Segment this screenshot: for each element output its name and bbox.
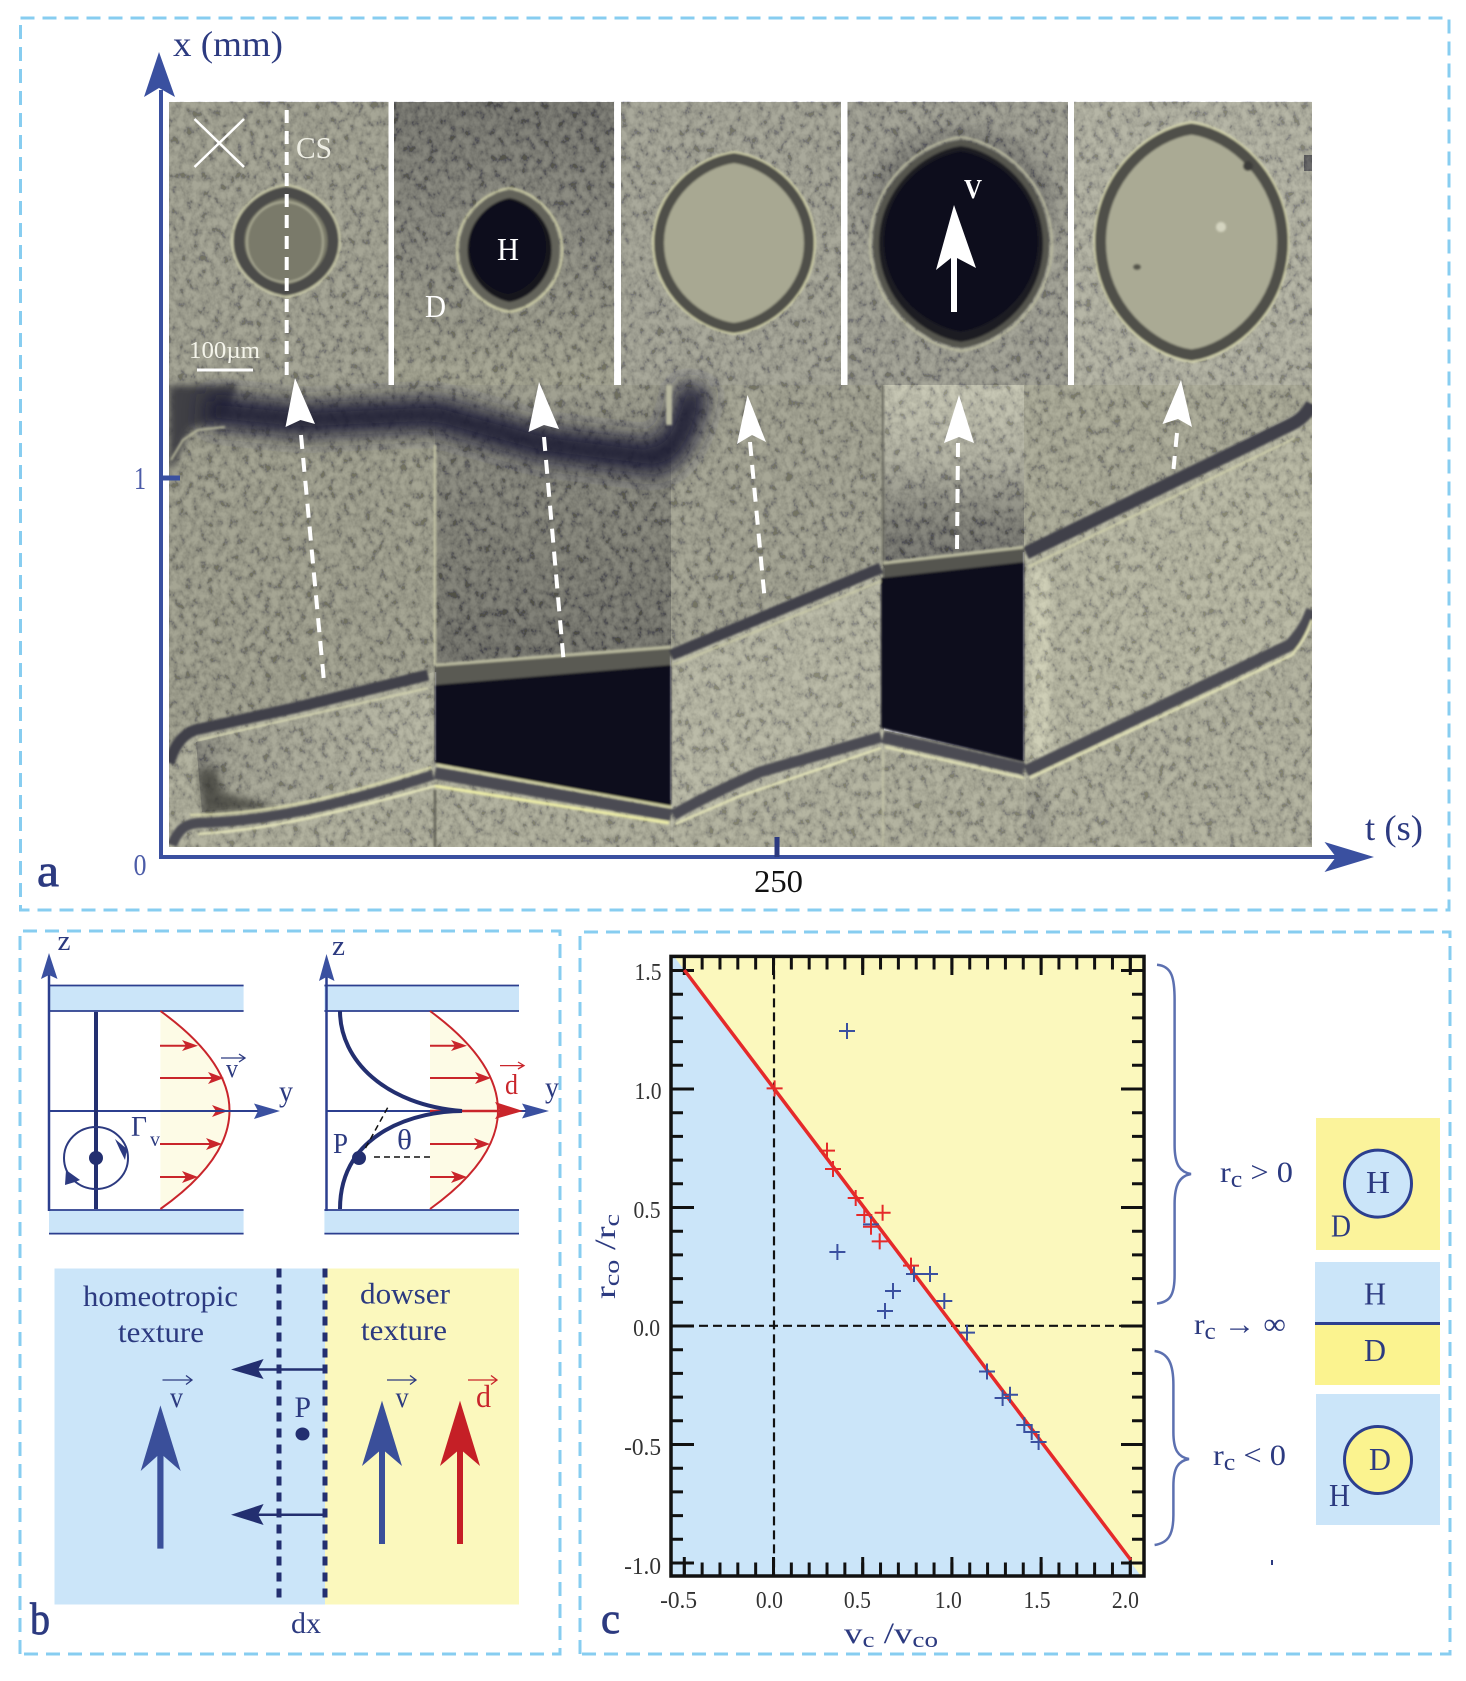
- y axis: [326, 1110, 530, 1112]
- label V: V: [964, 174, 982, 204]
- d vector label: [500, 1062, 524, 1101]
- defect lines and black domains: [169, 385, 1312, 847]
- label z: z: [332, 931, 345, 962]
- dark corner: [169, 385, 238, 470]
- blue v arrow dowser: [362, 1401, 402, 1544]
- blue v arrow homeotropic: [141, 1405, 181, 1549]
- blue region: [671, 956, 1144, 1576]
- label d: [468, 1376, 497, 1414]
- x tick labels: 0.5: [844, 1588, 871, 1614]
- x axis title: /v: [874, 1617, 912, 1650]
- x axis title: v: [844, 1617, 859, 1650]
- droplet 1: [232, 185, 340, 297]
- gamma subscript: v: [150, 1129, 160, 1151]
- d vector label: d: [505, 1070, 518, 1101]
- panel b: [20, 926, 560, 1654]
- y tick labels: 0.5: [634, 1198, 660, 1224]
- y axis head: [522, 1104, 549, 1118]
- dashed arrow 1: [286, 378, 324, 687]
- y tick labels: -0.5: [624, 1435, 661, 1461]
- micrograph backgrounds: [169, 102, 1312, 385]
- text texture: texture: [118, 1316, 204, 1349]
- tangent dashed: [366, 1107, 388, 1148]
- v vector label: v: [226, 1054, 238, 1083]
- label y: y: [545, 1071, 559, 1104]
- scale label: 100µm: [189, 338, 260, 364]
- y tick labels: -1.0: [624, 1554, 661, 1580]
- lower brace: [1155, 1351, 1189, 1545]
- horizontal dashed: [374, 1156, 430, 1158]
- label dx: dx: [291, 1607, 321, 1640]
- droplet 3: [653, 152, 815, 334]
- scatter chart: [589, 956, 1144, 1652]
- y tick labels: 1.5: [634, 960, 662, 986]
- yellow region: [674, 956, 1144, 1576]
- director curve: [340, 1011, 462, 1209]
- tick 0: 0: [134, 847, 146, 882]
- schematic rc>0: H: [1366, 1164, 1390, 1200]
- glass plates: [49, 986, 244, 1234]
- label v: v: [170, 1381, 183, 1414]
- label y: y: [279, 1075, 293, 1108]
- fit line: [684, 970, 1131, 1560]
- panel letter a: a: [37, 845, 59, 896]
- droplet 2 black: [457, 188, 562, 312]
- panel a: [20, 18, 1449, 910]
- label v: [387, 1376, 416, 1414]
- text texture: texture: [361, 1314, 447, 1347]
- dashed arrow 2: [528, 382, 564, 665]
- x axis t(s) arrow: [159, 837, 1374, 872]
- tick marks: [677, 963, 1138, 1569]
- y axis x(mm) arrow: [144, 52, 180, 857]
- label theta: θ: [397, 1125, 412, 1156]
- x tick labels: [660, 1588, 1139, 1614]
- point P: [352, 1151, 366, 1165]
- label D: D: [425, 288, 446, 324]
- micrograph and space-time photo: [169, 101, 1312, 850]
- space-time fields: [169, 385, 1312, 850]
- axis label x: x (mm): [173, 24, 283, 64]
- y axis head: [254, 1104, 280, 1119]
- label rc < 0: r: [1213, 1439, 1223, 1472]
- y tick labels: [624, 960, 662, 1580]
- x tick labels: 1.0: [935, 1588, 962, 1614]
- gamma label: Γ: [131, 1112, 147, 1143]
- schematic rc infinite: D: [1364, 1332, 1386, 1368]
- upper brace: [1157, 965, 1191, 1304]
- axis label t: t (s): [1365, 808, 1423, 848]
- schematic rc>0: D: [1331, 1208, 1351, 1244]
- x tick labels: 2.0: [1112, 1588, 1139, 1614]
- red data points: [767, 1080, 919, 1274]
- dashed arrow 3: [737, 395, 766, 597]
- scale bar: [197, 368, 253, 372]
- panel letter c: c: [601, 1596, 620, 1643]
- label rc > 0: r: [1220, 1156, 1230, 1189]
- tick 1: 1: [134, 460, 146, 496]
- lower motion arrow: [231, 1504, 325, 1525]
- panel letter b: b: [30, 1593, 50, 1644]
- droplet 4 black: [870, 137, 1052, 351]
- label rc > 0: > 0: [1242, 1156, 1293, 1189]
- vignette of left field: [198, 768, 280, 814]
- schematic rc<0: D: [1369, 1441, 1391, 1477]
- z axis head: [319, 954, 334, 981]
- y axis title: /r: [589, 1227, 622, 1260]
- label rc < 0: < 0: [1235, 1439, 1286, 1472]
- director arrow: [430, 1102, 523, 1119]
- label H: H: [497, 231, 519, 267]
- texture noise: [169, 101, 1312, 847]
- homeotropic region: [54, 1268, 325, 1604]
- label rc to infinity: → ∞: [1216, 1308, 1286, 1341]
- y tick labels: 1.0: [634, 1079, 662, 1105]
- polarizer cross: [194, 119, 244, 167]
- text dowser: dowser: [360, 1278, 450, 1310]
- y axis title: r: [589, 1289, 622, 1299]
- x axis title: c: [862, 1627, 875, 1652]
- x axis title: co: [912, 1627, 938, 1652]
- tick 250: 250: [754, 863, 803, 899]
- y axis: [49, 1110, 260, 1112]
- label rc < 0: c: [1224, 1450, 1235, 1476]
- z axis: [325, 975, 328, 1211]
- y axis title: co: [599, 1260, 624, 1286]
- label rc to infinity: c: [1205, 1319, 1216, 1345]
- left schematic: vortex: [41, 926, 293, 1234]
- profile arrows: [160, 1040, 228, 1183]
- label P: P: [333, 1128, 348, 1160]
- schematic rc>0: [1316, 1118, 1440, 1250]
- label v: [162, 1376, 192, 1414]
- profile arrows: [430, 1040, 491, 1183]
- velocity profile: [430, 1011, 498, 1209]
- y tick labels: 0.0: [633, 1316, 660, 1342]
- velocity arrow: [936, 205, 976, 312]
- v vector label: [221, 1054, 245, 1083]
- panel c: [580, 932, 1450, 1654]
- frame: [671, 956, 1144, 1576]
- dowser region: [325, 1268, 519, 1604]
- cross-section dashed line: [285, 110, 289, 377]
- schematic rc infinite: [1315, 1262, 1440, 1385]
- vortex line: [94, 1012, 98, 1209]
- x tick labels: 0.0: [756, 1588, 783, 1614]
- dashed axes: [671, 956, 1144, 1576]
- y axis title: c: [599, 1214, 624, 1227]
- rotation circle: [64, 1127, 128, 1189]
- dotted boundaries: [279, 1268, 325, 1604]
- point P: [296, 1428, 310, 1440]
- x tick labels: -0.5: [660, 1588, 697, 1614]
- label rc to infinity: r: [1194, 1308, 1204, 1341]
- droplet 5: [1094, 122, 1288, 362]
- z axis: [48, 975, 50, 1211]
- velocity profile: [160, 1011, 230, 1209]
- dashed arrow 4: [944, 395, 974, 551]
- red d arrow: [440, 1401, 480, 1544]
- z axis head: [41, 953, 58, 979]
- dark smear: [205, 385, 694, 458]
- label v: v: [396, 1381, 409, 1414]
- schematic rc<0: H: [1329, 1477, 1350, 1513]
- upper motion arrow: [231, 1359, 325, 1379]
- schematic rc<0: [1316, 1394, 1440, 1525]
- white dividers: [388, 101, 1074, 385]
- label CS: CS: [296, 130, 332, 165]
- stray mark: [1271, 1560, 1273, 1565]
- plates: [324, 986, 519, 1234]
- schematic rc infinite: H: [1364, 1276, 1386, 1312]
- blue data points: [829, 1023, 1047, 1450]
- text homeotropic: homeotropic: [83, 1280, 238, 1313]
- label rc > 0: c: [1231, 1167, 1242, 1193]
- dashed arrow 5: [1162, 380, 1192, 469]
- x tick labels: 1.5: [1024, 1588, 1050, 1614]
- label z: z: [58, 926, 70, 957]
- right schematic: director: [319, 931, 559, 1234]
- label d: d: [476, 1378, 491, 1414]
- label P: P: [294, 1391, 311, 1424]
